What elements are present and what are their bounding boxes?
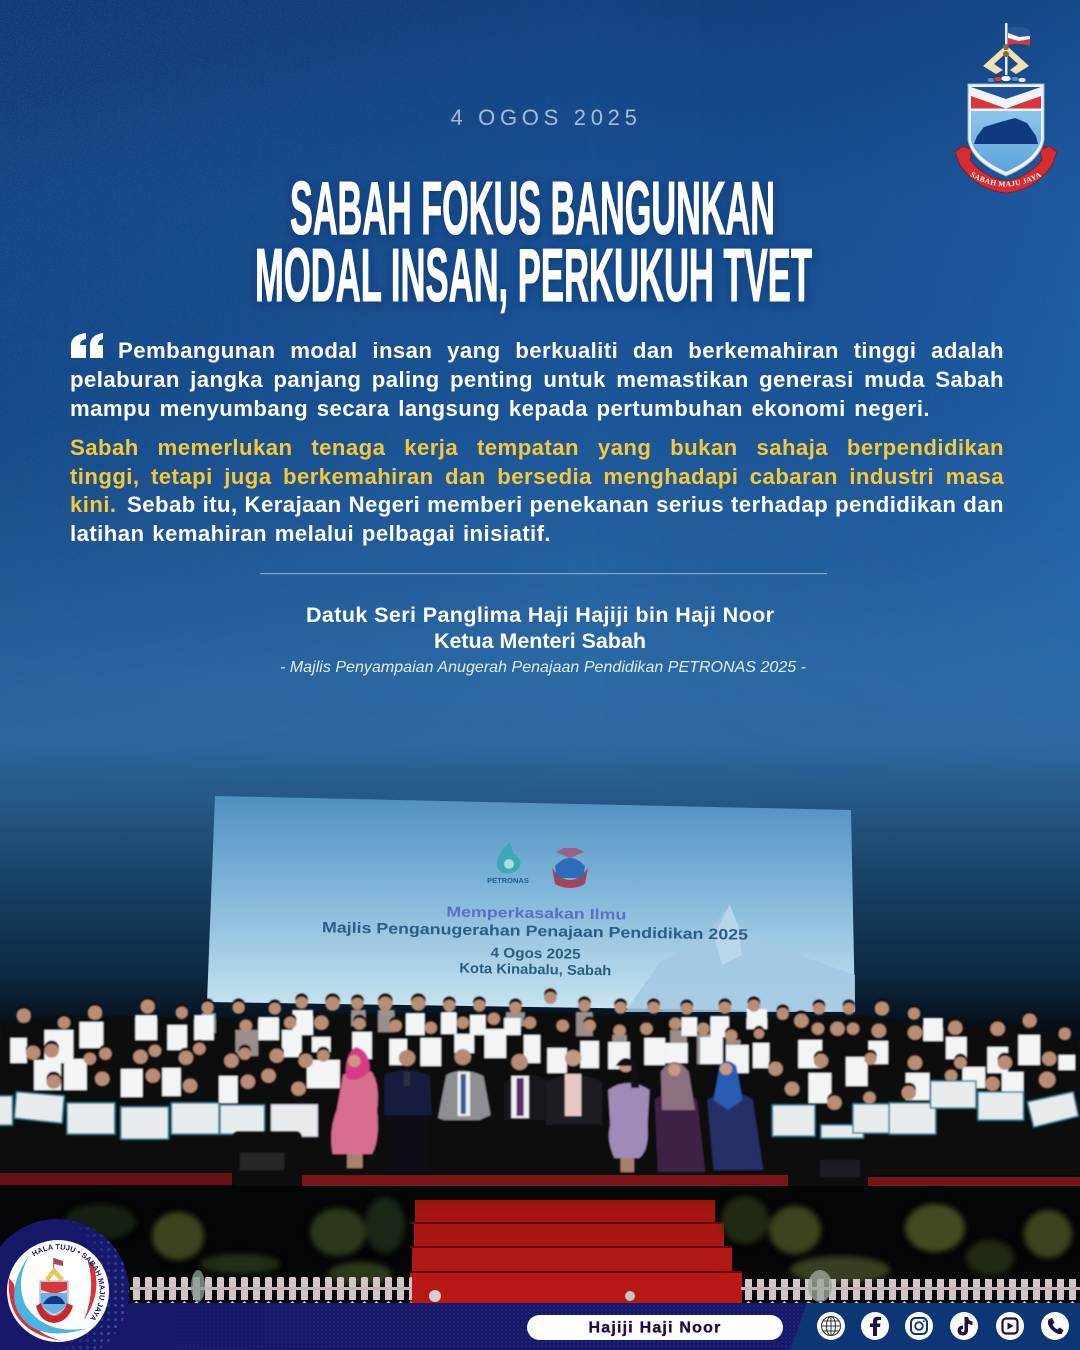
divider [260,573,827,574]
icon: Sabah crest [954,23,1058,194]
crowd on stage [0,988,1080,1188]
paragraph two: kini. [70,492,116,517]
screen logos: PETRONAS [487,876,529,885]
plants [64,1196,1072,1286]
name pill [527,1315,783,1340]
name pill: Hajiji Haji Noor [588,1320,722,1336]
speaker name: Datuk Seri Panglima Haji Hajiji bin Haji Noor [306,603,775,627]
date: 4 OGOS 2025 [450,105,642,130]
white picket fence [130,1270,1080,1303]
icon: facebook [861,1312,889,1340]
paragraph two: Sebab itu, Kerajaan Negeri memberi penekanan serius terhadap pendidikan dan [127,492,1004,517]
maroon lady [655,1062,705,1172]
screen text: Kota Kinabalu, Sabah [459,960,611,978]
badge navy disc [0,1219,129,1350]
crowd left half [0,994,550,1173]
icon: phone [1041,1312,1069,1340]
event photo [0,796,1080,1303]
icon: instagram [905,1312,933,1340]
paragraph two: Sabah memerlukan tenaga kerja tempatan yang bukan sahaja berpendidikan [70,435,1004,460]
red carpet stairs [410,1200,742,1303]
attribution [280,603,806,676]
campaign badge: Hala Tuju Sabah Maju Jaya [0,1219,129,1349]
title [255,166,812,317]
footer bar [0,1303,1080,1350]
lilac lady [608,1058,650,1172]
arms [983,46,1029,74]
screen text: Majlis Penganugerahan Penajaan Pendidikan 2025 [322,919,748,944]
icon: website globe [817,1312,845,1340]
crowd right half [544,988,1078,1172]
speaker role: Ketua Menteri Sabah [434,629,646,653]
stage front [0,1173,1080,1303]
mountain [625,905,855,1012]
paragraph two: latihan kemahiran melalui pelbagai inisiatif. [70,521,551,546]
flag pole [1005,23,1008,75]
badge mini crest [36,1258,73,1323]
social icons [817,1312,1069,1340]
dark suit purple tie [504,1054,550,1172]
quote text block [70,338,1004,546]
icon: tiktok [950,1312,978,1340]
beads [987,76,1026,82]
pink baju lady [331,1047,378,1168]
paragraph two [70,435,1004,546]
paragraph one [70,338,1004,421]
shield [968,84,1044,176]
paragraph one: mampu menyumbang secara langsung kepada pertumbuhan ekonomi negeri. [70,396,930,421]
ribbon text: SABAH MAJU JAYA [970,172,1042,187]
paragraph two: tinggi, tetapi juga berkemahiran dan bersedia menghadapi cabaran industri masa [70,464,1004,489]
dark suit pink shirt [546,1050,602,1172]
screen text [321,902,748,981]
floor speakers [232,1131,302,1186]
screen text: Memperkasakan Ilmu [446,904,626,924]
dark suit man [384,1050,432,1173]
screen text: 4 Ogos 2025 [490,944,581,962]
badge arc text: HALA TUJU • SABAH MAJU JAYA [32,1244,105,1320]
grey suit man [438,1049,491,1172]
flag [1008,27,1030,46]
icon: youtube play [996,1312,1024,1340]
ribbon [955,146,1057,193]
badge white disc [7,1240,109,1342]
screen logos [487,842,588,888]
stage backdrop screen [207,796,855,1012]
paragraph one: Pembangunan modal insan yang berkualiti dan berkemahiran tinggi adalah [118,338,1004,363]
paragraph one: pelaburan jangka panjang paling penting untuk memastikan generasi muda Sabah [70,367,1004,392]
event name: - Majlis Penyampaian Anugerah Penajaan Pendidikan PETRONAS 2025 - [280,659,806,676]
dark bodies [0,1012,1080,1175]
badge swooshes [9,1278,62,1341]
blue hijab lady [707,1061,763,1170]
quote mark icon [71,333,103,358]
